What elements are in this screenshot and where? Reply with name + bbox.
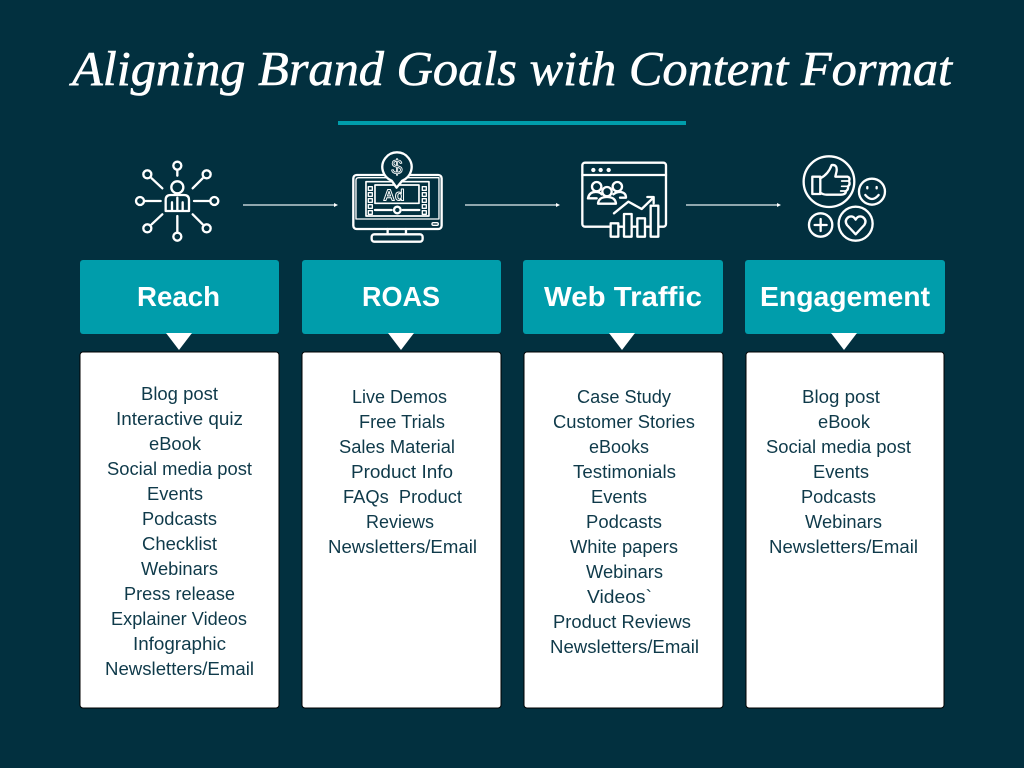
list: ROAS formats: Product Info: [351, 462, 453, 482]
list: Engagement formats: eBook: [818, 412, 871, 432]
list: Web Traffic formats: [550, 387, 699, 657]
list: Web Traffic formats: Case Study: [577, 387, 671, 407]
list: Web Traffic formats: Testimonials: [573, 462, 676, 482]
list: Reach formats: Newsletters/Email: [105, 659, 254, 679]
header: Engagement: Engagement: [760, 281, 930, 312]
list: ROAS formats: FAQs Product: [343, 487, 462, 507]
list: Web Traffic formats: Product Reviews: [553, 612, 691, 632]
list: Engagement formats: [766, 387, 918, 557]
list: Engagement formats: Newsletters/Email: [769, 537, 918, 557]
list: Web Traffic formats: Webinars: [586, 562, 663, 582]
header: Web Traffic: Web Traffic: [544, 281, 702, 312]
panel: Engagement: [745, 260, 945, 708]
icon: ad monitor: [353, 152, 442, 242]
list: ROAS formats: Sales Material: [339, 437, 455, 457]
list: ROAS formats: Free Trials: [359, 412, 445, 432]
icon: engagement reactions: [804, 156, 885, 241]
list: Reach formats: Blog post: [141, 384, 218, 404]
icon: web analytics: [582, 163, 666, 237]
header: ROAS: ROAS: [362, 281, 440, 312]
pointer: Web Traffic: [609, 333, 635, 350]
list: Reach formats: Podcasts: [142, 509, 217, 529]
list: Engagement formats: Events: [813, 462, 869, 482]
card: Web Traffic formats: [524, 352, 723, 708]
card: Engagement formats: [746, 352, 944, 708]
list: Reach formats: Infographic: [133, 634, 226, 654]
list: Reach formats: Events: [147, 484, 203, 504]
pointer: Engagement: [831, 333, 857, 350]
list: ROAS formats: Newsletters/Email: [328, 537, 477, 557]
header: Engagement: [745, 260, 945, 334]
icon: ad monitor: $: [391, 157, 403, 179]
list: Reach formats: Press release: [124, 584, 235, 604]
list: Web Traffic formats: Events: [591, 487, 647, 507]
header: Web Traffic: [523, 260, 723, 334]
list: Engagement formats: Social media post: [766, 437, 911, 457]
list: Web Traffic formats: Podcasts: [586, 512, 662, 532]
panel: Web Traffic: [523, 260, 723, 708]
list: ROAS formats: Reviews: [366, 512, 434, 532]
list: Engagement formats: Blog post: [802, 387, 880, 407]
card: ROAS formats: [302, 352, 501, 708]
list: Reach formats: Webinars: [141, 559, 218, 579]
panel: Reach: [80, 260, 279, 708]
list: Web Traffic formats: Newsletters/Email: [550, 637, 699, 657]
arrow: ROAS to web traffic: [465, 203, 560, 207]
header: ROAS: [302, 260, 501, 334]
list: Reach formats: Social media post: [107, 459, 252, 479]
list: ROAS formats: [328, 387, 477, 557]
list: Engagement formats: Podcasts: [801, 487, 876, 507]
title underline: [338, 121, 686, 125]
icon: ad monitor: Ad: [383, 187, 405, 204]
list: Reach formats: eBook: [149, 434, 202, 454]
header: Reach: [80, 260, 279, 334]
arrow: reach to ROAS: [243, 203, 338, 207]
list: Reach formats: Interactive quiz: [116, 409, 243, 429]
pointer: Reach: [166, 333, 192, 350]
list: Engagement formats: Webinars: [805, 512, 882, 532]
list: Reach formats: [105, 384, 254, 679]
list: Reach formats: Checklist: [142, 534, 217, 554]
title: Aligning Brand Goals with Content Format: [69, 41, 953, 96]
list: Web Traffic formats: Customer Stories: [553, 412, 695, 432]
list: Web Traffic formats: Videos`: [587, 587, 652, 607]
icon: reach network: [136, 162, 218, 241]
list: Web Traffic formats: White papers: [570, 537, 678, 557]
list: Web Traffic formats: eBooks: [589, 437, 649, 457]
pointer: ROAS: [388, 333, 414, 350]
card: Reach formats: [80, 352, 279, 708]
arrow: web traffic to engagement: [686, 203, 781, 207]
panel: ROAS: [302, 260, 501, 708]
header: Reach: Reach: [137, 281, 220, 312]
list: Reach formats: Explainer Videos: [111, 609, 247, 629]
list: ROAS formats: Live Demos: [352, 387, 447, 407]
